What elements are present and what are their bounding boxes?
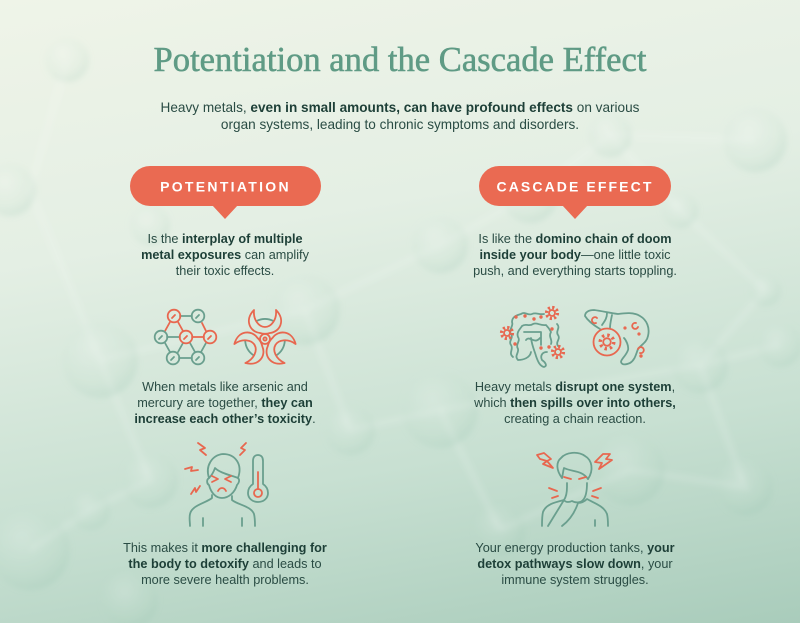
text: energy and detox bbox=[475, 541, 675, 587]
text: cascade definition bbox=[473, 232, 677, 278]
badge: potentiation bbox=[130, 166, 321, 219]
text: metals together bbox=[134, 380, 316, 426]
text: health problems: the body to detoxify and leads to bbox=[128, 557, 322, 571]
text: potentiation definition bbox=[141, 232, 309, 278]
text: metals together: When metals like arsenic and bbox=[142, 380, 308, 394]
text: cascade definition: inside your body—one little toxic bbox=[479, 248, 671, 262]
text: energy and detox: detox pathways slow down, your bbox=[477, 557, 673, 571]
text: system disruption: Heavy metals disrupt one system, bbox=[475, 380, 675, 394]
text: potentiation definition: Is the interplay of multiple bbox=[147, 232, 303, 246]
text: energy and detox: immune system struggles. bbox=[501, 573, 649, 587]
icon: liver with virus bbox=[585, 310, 649, 364]
text: metals together: mercury are together, they can bbox=[137, 396, 313, 410]
title: Potentiation and the Cascade Effect bbox=[154, 41, 646, 79]
intro text: Heavy metals, even in small amounts, can have profound effects on various bbox=[161, 100, 639, 115]
intro text: organ systems, leading to chronic symptoms and disorders. bbox=[221, 117, 579, 132]
badge: cascade effect: CASCADE EFFECT bbox=[497, 178, 653, 194]
text: metals together: increase each other’s toxicity. bbox=[134, 412, 316, 426]
text: cascade definition: push, and everything starts toppling. bbox=[473, 264, 677, 278]
intro text bbox=[161, 100, 639, 132]
badge: potentiation: POTENTIATION bbox=[160, 178, 291, 194]
icon: person with fever and thermometer bbox=[185, 443, 268, 526]
icon: molecule network bbox=[155, 310, 216, 364]
icon: biohazard bbox=[232, 310, 298, 367]
text: health problems: more severe health problems. bbox=[141, 573, 309, 587]
icon: intestines with gears bbox=[502, 308, 564, 367]
text: system disruption bbox=[474, 380, 676, 426]
text: cascade definition: Is like the domino chain of doom bbox=[478, 232, 672, 246]
text: energy and detox: Your energy production tanks, your bbox=[475, 541, 675, 555]
text: health problems: This makes it more challenging for bbox=[123, 541, 327, 555]
icon: person with headache and nausea bbox=[537, 453, 612, 526]
text: system disruption: which then spills over into others, bbox=[474, 396, 676, 410]
text: potentiation definition: metal exposures can amplify bbox=[141, 248, 309, 262]
text: health problems bbox=[123, 541, 327, 587]
text: potentiation definition: their toxic effects. bbox=[176, 264, 274, 278]
badge: cascade effect bbox=[479, 166, 671, 219]
text: system disruption: creating a chain reaction. bbox=[504, 412, 646, 426]
